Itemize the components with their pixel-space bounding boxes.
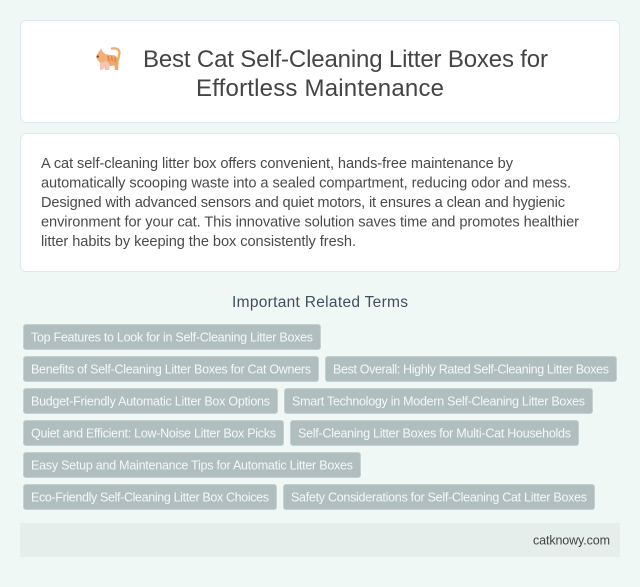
title: Effortless Maintenance — [196, 75, 444, 102]
tag list — [24, 324, 616, 510]
description text: A cat self-cleaning litter box offers convenient, hands-free maintenance by — [41, 156, 514, 172]
tag — [24, 452, 360, 478]
tag: Quiet and Efficient: Low-Noise Litter Box Picks — [31, 426, 276, 440]
panel: title card — [20, 20, 620, 122]
footer — [20, 523, 620, 557]
tag — [24, 484, 276, 510]
tag: Self-Cleaning Litter Boxes for Multi-Cat Households — [298, 426, 571, 440]
tag: Easy Setup and Maintenance Tips for Automatic Litter Boxes — [31, 458, 353, 472]
description text: Designed with advanced sensors and quiet motors, it ensures a clean and hygienic — [41, 195, 565, 211]
tag: Safety Considerations for Self-Cleaning Cat Litter Boxes — [291, 490, 587, 504]
title: Best Cat Self-Cleaning Litter Boxes for — [143, 46, 548, 73]
tag: Benefits of Self-Cleaning Litter Boxes for Cat Owners — [31, 362, 311, 376]
description text: environment for your cat. This innovative solution saves time and promotes healthier — [41, 214, 579, 230]
description text: automatically scooping waste into a sealed compartment, reducing odor and mess. — [41, 176, 571, 192]
tag: Best Overall: Highly Rated Self-Cleaning Litter Boxes — [333, 362, 609, 376]
title — [143, 46, 548, 102]
tag — [24, 388, 278, 414]
tag: Budget-Friendly Automatic Litter Box Options — [31, 394, 270, 408]
tag: Top Features to Look for in Self-Cleaning Litter Boxes — [31, 330, 313, 344]
panel: description — [20, 134, 620, 272]
tag — [24, 420, 284, 446]
description text: litter habits by keeping the box consistently fresh. — [41, 234, 356, 250]
tag — [24, 356, 318, 382]
tag — [284, 388, 592, 414]
tag: Eco-Friendly Self-Cleaning Litter Box Choices — [31, 490, 269, 504]
tag — [326, 356, 616, 382]
tag — [284, 484, 594, 510]
icon: cat — [96, 48, 119, 70]
heading: related terms: Important Related Terms — [232, 294, 408, 311]
tag — [24, 324, 320, 350]
footer site name: catknowy.com — [533, 534, 610, 548]
tag — [290, 420, 578, 446]
tag: Smart Technology in Modern Self-Cleaning Litter Boxes — [292, 394, 585, 408]
description text — [41, 156, 579, 250]
